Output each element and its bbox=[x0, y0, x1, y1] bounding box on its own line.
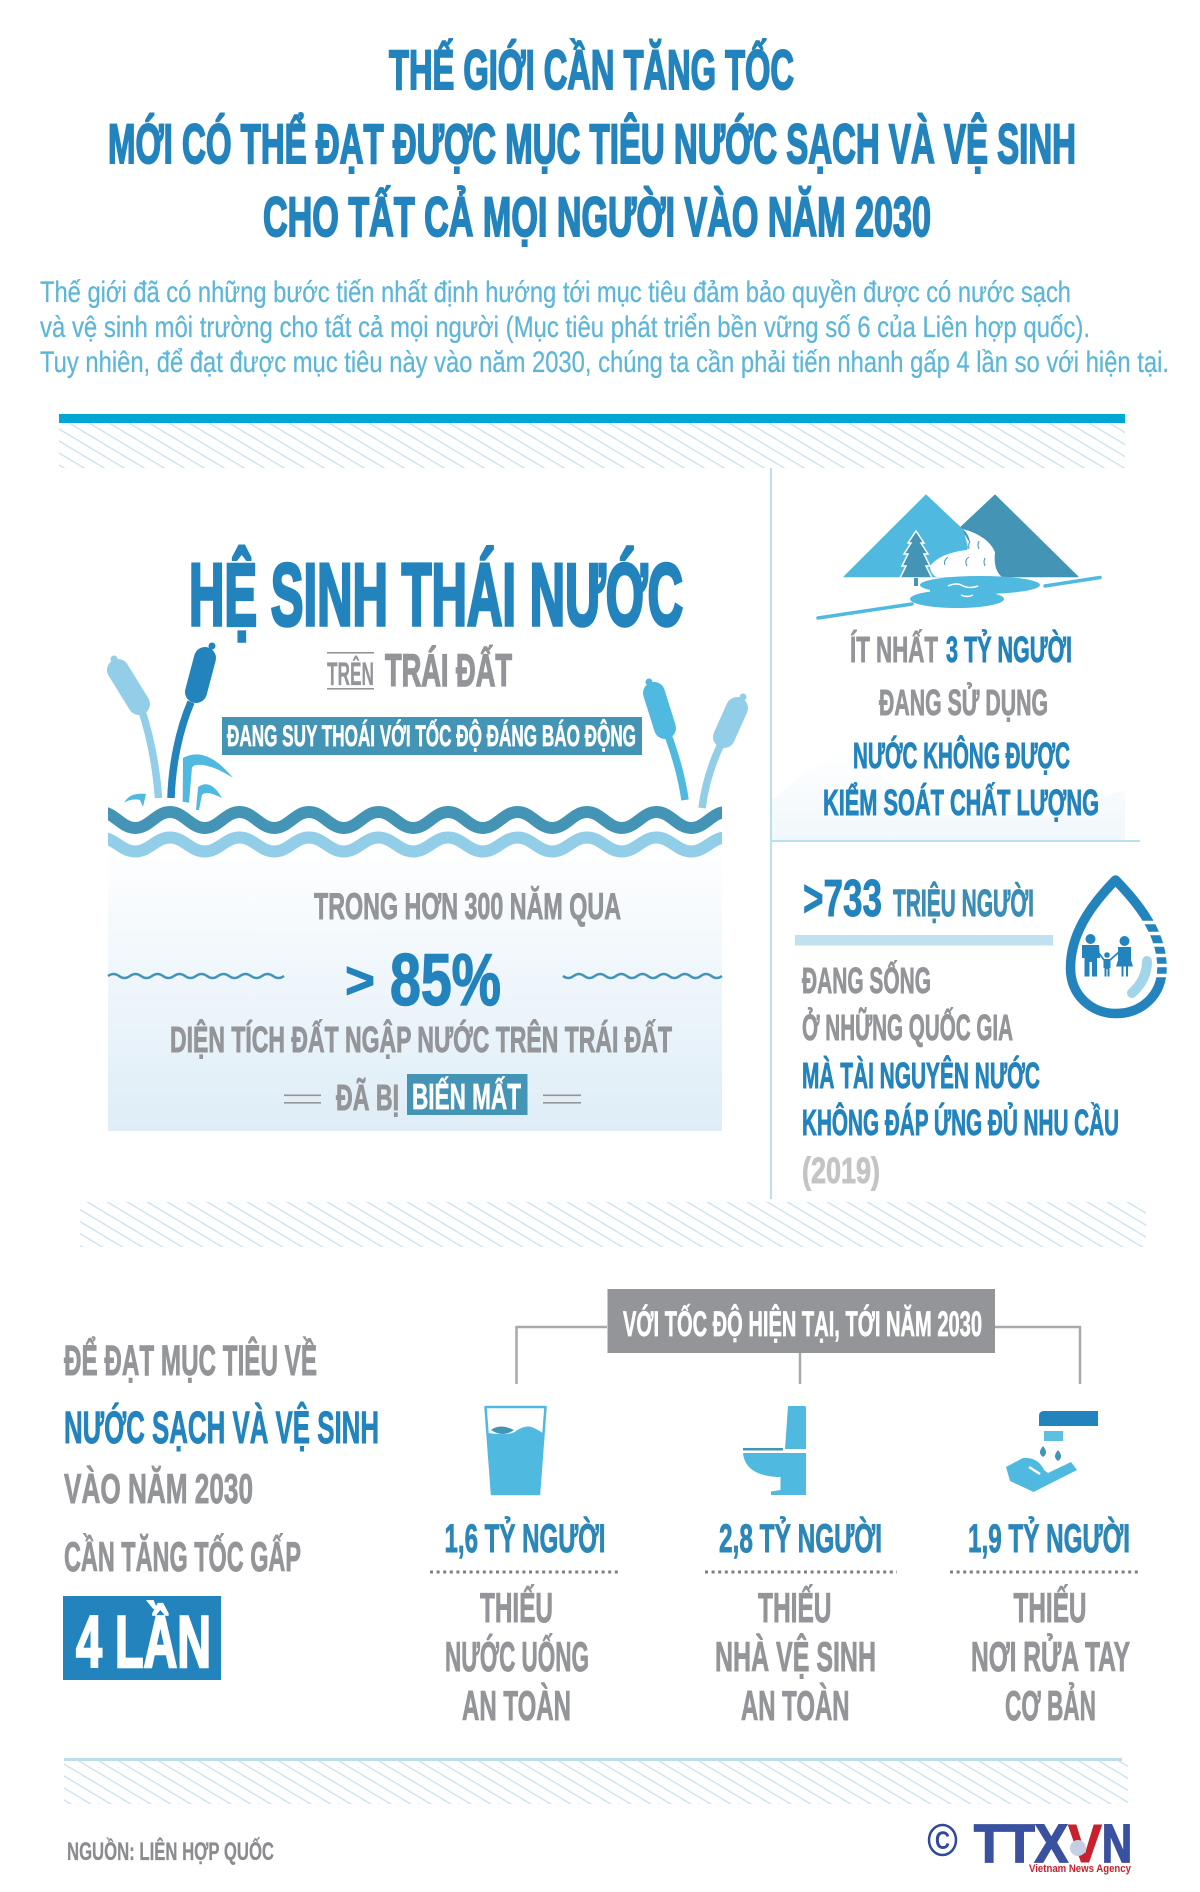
statistic: 85 percent bbox=[345, 940, 501, 1021]
title bbox=[108, 38, 1076, 248]
intro text bbox=[40, 276, 1169, 379]
value: 2.8 billion: 2,8 TỶ NGƯỜI bbox=[719, 1515, 882, 1561]
small wave right bbox=[563, 974, 722, 978]
subheading: on earth: TRÁI ĐẤT bbox=[385, 645, 512, 696]
source: NGUỒN: LIÊN HỢP QUỐC bbox=[67, 1836, 274, 1866]
panel: wetland ecosystem bbox=[100, 545, 746, 1131]
subheading: on earth: TRÊN bbox=[327, 656, 374, 692]
logo: TTXVN: TTX bbox=[974, 1814, 1068, 1874]
column: sanitation bbox=[705, 1406, 897, 1729]
text: lacking basic handwashing: CƠ BẢN bbox=[1005, 1681, 1096, 1729]
statistic: 733 million: TRIỆU NGƯỜI bbox=[893, 881, 1034, 925]
banner: degrading: ĐANG SUY THOÁI VỚI TỐC ĐỘ ĐÁNG BÁO ĐỘNG bbox=[227, 719, 636, 753]
text: living in countries: (2019) bbox=[802, 1150, 880, 1191]
text: lacking safe toilets: AN TOÀN bbox=[741, 1682, 850, 1729]
panel: speed up left text: NƯỚC SẠCH VÀ VỆ SINH bbox=[64, 1402, 379, 1453]
icon: glass of water bbox=[486, 1407, 546, 1494]
logo: TTXVN: C bbox=[935, 1827, 950, 1855]
statistic: 733 million: >733 bbox=[803, 870, 882, 928]
waves bbox=[100, 812, 726, 852]
text: has disappeared bbox=[284, 1074, 581, 1118]
icon: left reeds bbox=[110, 642, 233, 810]
heading: water ecosystem: HỆ SINH THÁI NƯỚC bbox=[189, 545, 683, 644]
text: lacking safe drinking water: THIẾU bbox=[480, 1584, 553, 1631]
logo: TTXVN: V bbox=[1068, 1814, 1102, 1874]
text: at least 3 billion bbox=[823, 628, 1099, 823]
subheading: on earth bbox=[327, 645, 512, 696]
text: living in countries: Ở NHỮNG QUỐC GIA bbox=[802, 1006, 1013, 1048]
icon: tap and hand bbox=[1006, 1411, 1098, 1492]
text: has disappeared: BIẾN MẤT bbox=[412, 1076, 521, 1117]
text: lacking safe drinking water bbox=[445, 1584, 589, 1729]
small wave left bbox=[108, 974, 284, 978]
panel: speed up left text: ĐỂ ĐẠT MỤC TIÊU VỀ bbox=[64, 1336, 317, 1385]
text: at least 3 billion: ĐANG SỬ DỤNG bbox=[879, 681, 1048, 723]
logo: TTXVN: Vietnam News Agency bbox=[1029, 1863, 1132, 1875]
column: drinking water bbox=[430, 1407, 621, 1729]
logo: TTXVN bbox=[929, 1814, 1132, 1875]
text: living in countries bbox=[802, 959, 1119, 1191]
icon: water drop with family bbox=[1070, 880, 1175, 1014]
statistic: 733 million bbox=[803, 870, 1034, 928]
text: lacking safe toilets: THIẾU bbox=[758, 1584, 832, 1631]
statistic: 85 percent: > bbox=[345, 952, 375, 1010]
text: wetland area: DIỆN TÍCH ĐẤT NGẬP NƯỚC TRÊN TRÁI ĐẤT bbox=[170, 1018, 672, 1060]
panel: speed up left text: VÀO NĂM 2030 bbox=[64, 1465, 253, 1512]
panel: speed up left text: CẦN TĂNG TỐC GẤP bbox=[64, 1532, 301, 1580]
callout: 4 times: 4 LẦN bbox=[76, 1602, 211, 1683]
panel: 733 million people bbox=[795, 870, 1175, 1191]
logo: TTXVN: N bbox=[1102, 1814, 1132, 1874]
icon: mountains and lake bbox=[818, 495, 1100, 618]
text: lacking safe drinking water: NƯỚC UỐNG bbox=[445, 1632, 589, 1680]
title: THẾ GIỚI CẦN TĂNG TỐC bbox=[389, 38, 794, 101]
text: has disappeared: ĐÃ BỊ bbox=[336, 1076, 399, 1118]
connector lines bbox=[516, 1327, 1080, 1384]
text: at least 3 billion: 3 TỶ NGƯỜI bbox=[946, 628, 1072, 670]
banner: degrading bbox=[222, 717, 642, 755]
text: living in countries: ĐANG SỐNG bbox=[802, 959, 931, 1001]
header box: at the current rate bbox=[608, 1289, 995, 1353]
panel: 3 billion people bbox=[772, 495, 1125, 840]
callout: 4 times bbox=[63, 1596, 221, 1683]
statistic: 85 percent: 85% bbox=[390, 940, 501, 1021]
text: lacking basic handwashing: THIẾU bbox=[1014, 1584, 1086, 1631]
column: handwashing bbox=[950, 1411, 1141, 1729]
text: over 300 years: TRONG HƠN 300 NĂM QUA bbox=[314, 886, 621, 927]
text: at least 3 billion: ÍT NHẤT bbox=[850, 629, 938, 670]
icon: toilet bbox=[743, 1406, 806, 1495]
text: lacking safe drinking water: AN TOÀN bbox=[462, 1682, 571, 1729]
text: lacking safe toilets bbox=[715, 1584, 876, 1729]
icon: right reeds bbox=[646, 678, 746, 808]
value: 1.6 billion: 1,6 TỶ NGƯỜI bbox=[444, 1515, 606, 1561]
text: lacking safe toilets: NHÀ VỆ SINH bbox=[715, 1632, 876, 1680]
text: lacking basic handwashing bbox=[971, 1584, 1130, 1729]
panel: speed up left text bbox=[63, 1336, 379, 1683]
